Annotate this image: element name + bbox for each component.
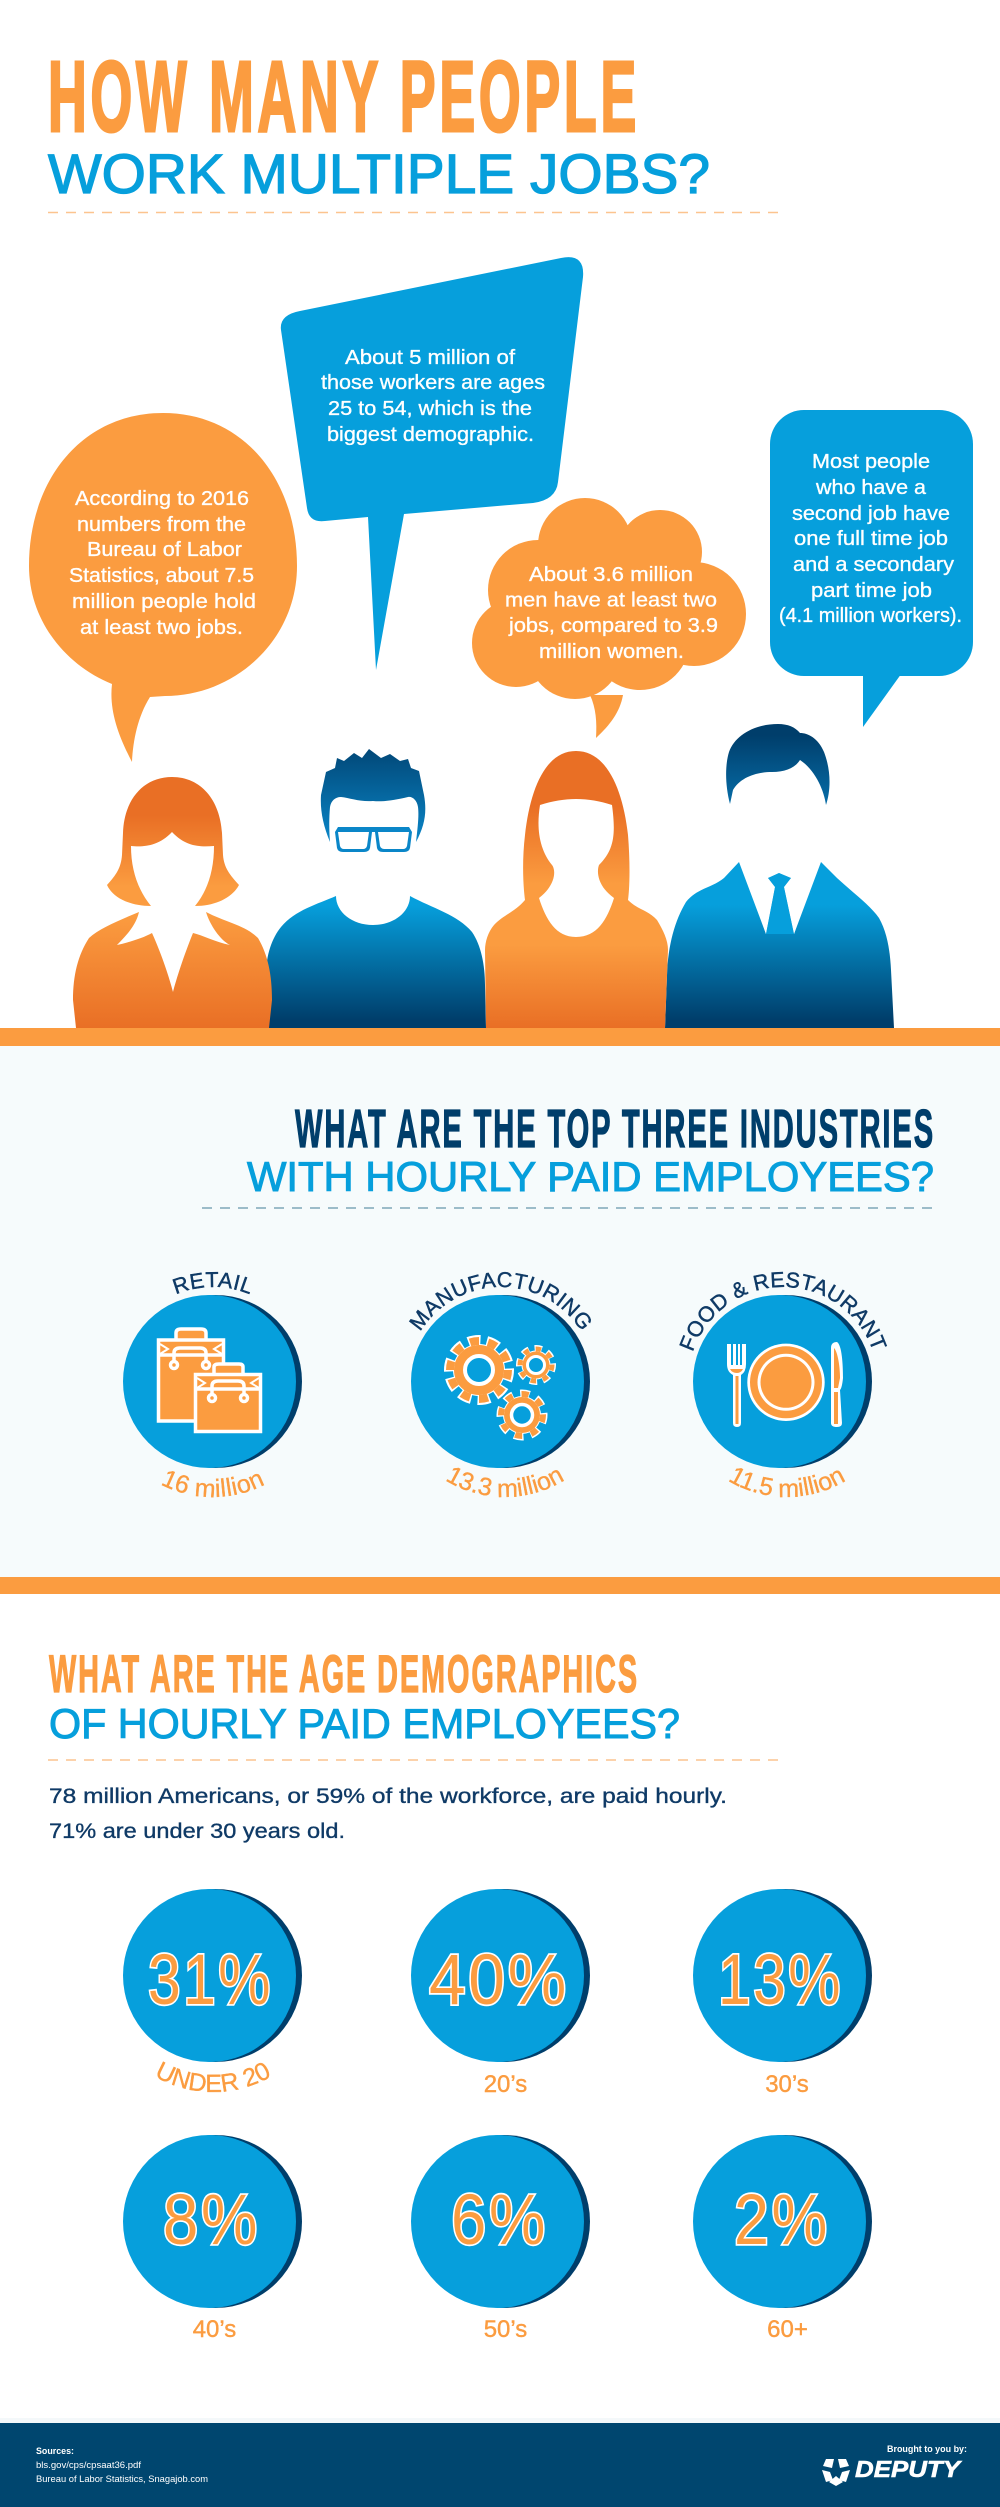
stat: 50's: 50’s <box>484 2316 527 2343</box>
title: WORK MULTIPLE JOBS? <box>48 142 710 205</box>
speech bubble: second job: second job have <box>792 502 950 525</box>
industry: manufacturing <box>408 1272 591 1498</box>
person: man with glasses <box>266 749 486 1028</box>
orange divider bar <box>0 1028 1000 1046</box>
speech bubble: men and women: About 3.6 million <box>529 563 693 586</box>
heading: age demographics: OF HOURLY PAID EMPLOYEES? <box>49 1700 680 1747</box>
speech bubble: ages 25 to 54: 25 to 54, which is the <box>328 397 532 420</box>
sources <box>36 2446 208 2485</box>
industry: food and restaurant: 11.5 million <box>729 1468 846 1498</box>
stat: under 20: UNDER 20 <box>157 2061 270 2092</box>
person: man in suit <box>665 724 894 1028</box>
stat: 20's: 40% <box>429 1941 569 2020</box>
speech bubble: ages 25 to 54 <box>281 257 583 670</box>
speech bubble: second job: and a secondary <box>793 553 955 576</box>
stat: 40's: 40’s <box>193 2316 236 2343</box>
stat: 20's: 20’s <box>484 2071 527 2098</box>
speech bubble: men and women <box>472 498 746 738</box>
stat: 40's <box>123 2135 302 2343</box>
speech bubble: men and women: million women. <box>539 640 684 663</box>
stat: 30's: 13% <box>718 1941 843 2020</box>
stat: 20's <box>411 1889 590 2098</box>
industry: manufacturing: 13.3 million <box>446 1468 564 1498</box>
orange divider bar <box>0 1577 1000 1594</box>
stat: 40's: 8% <box>163 2181 260 2260</box>
sources: Bureau of Labor Statistics, Snagajob.com <box>36 2474 208 2485</box>
person: woman with long hair <box>485 751 668 1028</box>
industry: food and restaurant <box>679 1272 888 1498</box>
speech bubble: total workers: million people hold <box>72 590 256 613</box>
stat: 50's: 6% <box>451 2181 548 2260</box>
speech bubble: ages 25 to 54: biggest demographic. <box>327 423 534 446</box>
industry: retail: 16 million <box>162 1471 264 1498</box>
speech bubble: total workers: Statistics, about 7.5 <box>69 564 254 587</box>
text block: workforce summary: 78 million Americans, or 59% of the workforce, are paid hourly. <box>49 1784 727 1808</box>
speech bubble: total workers: Bureau of Labor <box>87 538 242 561</box>
icon: gears <box>450 1341 552 1436</box>
logo: Deputy <box>822 2444 967 2486</box>
speech bubble: second job: Most people <box>812 450 930 473</box>
person: woman with shoulder-length hair <box>73 777 272 1028</box>
industry: retail <box>123 1272 302 1498</box>
speech bubble: total workers: at least two jobs. <box>80 616 243 639</box>
sources: Sources: <box>36 2446 74 2457</box>
industry: food and restaurant: FOOD & RESTAURANT <box>679 1272 888 1351</box>
heading: industries: WITH HOURLY PAID EMPLOYEES? <box>247 1153 934 1200</box>
panel: top three industries <box>0 1046 1000 1577</box>
industry: manufacturing: MANUFACTURING <box>408 1272 591 1331</box>
speech bubble: total workers: numbers from the <box>77 513 246 536</box>
speech bubble: men and women: men have at least two <box>505 588 717 612</box>
speech bubble: second job <box>770 410 973 727</box>
industry: retail: RETAIL <box>172 1272 250 1294</box>
stat: 60+ <box>693 2135 872 2343</box>
speech bubble: total workers: According to 2016 <box>75 487 249 510</box>
speech bubble: total workers <box>29 413 297 762</box>
speech bubble: second job: one full time job <box>794 527 948 550</box>
stat: 60+: 2% <box>734 2181 830 2260</box>
speech bubble: second job: (4.1 million workers). <box>779 604 962 627</box>
footer <box>0 2418 1000 2507</box>
stat: 30's: 30’s <box>765 2071 809 2098</box>
icon: plate and cutlery <box>727 1342 843 1427</box>
speech bubble: men and women: jobs, compared to 3.9 <box>508 614 718 637</box>
text block: workforce summary: 71% are under 30 years old. <box>49 1819 345 1843</box>
heading: age demographics <box>49 1645 680 1747</box>
stat: 50's <box>411 2135 590 2343</box>
speech bubble: second job: part time job <box>811 579 932 602</box>
speech bubble: second job: who have a <box>815 476 927 499</box>
speech bubble: ages 25 to 54: those workers are ages <box>321 371 545 394</box>
speech bubble: ages 25 to 54: About 5 million of <box>345 346 515 369</box>
stat: under 20: 31% <box>148 1941 273 2020</box>
title <box>48 41 710 205</box>
stat: 60+: 60+ <box>767 2316 808 2343</box>
sources: bls.gov/cps/cpsaat36.pdf <box>36 2460 141 2471</box>
text block: workforce summary <box>49 1784 727 1843</box>
heading: industries <box>247 1099 935 1200</box>
stat: 30's <box>693 1889 872 2098</box>
logo: Deputy: Brought to you by: <box>887 2444 967 2455</box>
stat: under 20 <box>123 1889 302 2092</box>
logo: Deputy: DEPUTY <box>855 2456 963 2482</box>
icon: shopping bags <box>158 1329 261 1432</box>
